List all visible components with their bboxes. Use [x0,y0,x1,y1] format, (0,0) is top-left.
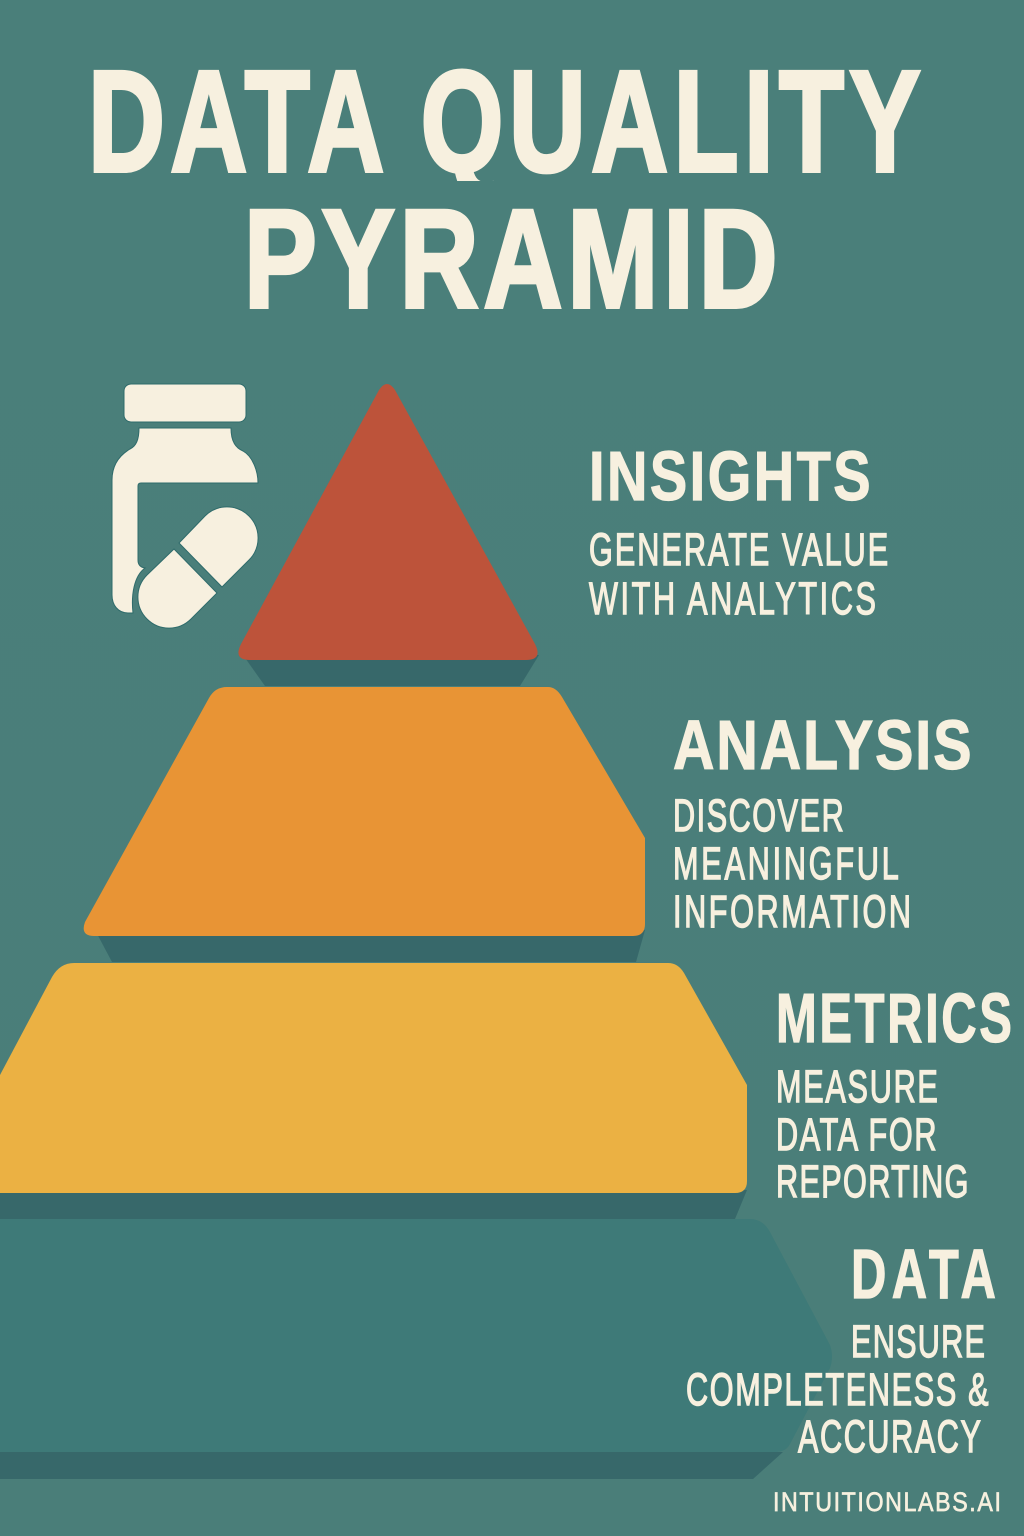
pyramid tier: analysis [84,687,645,962]
label: metrics: REPORTING [776,1157,968,1208]
title [94,68,922,309]
label: insights [589,438,888,625]
label: data: DATA [851,1234,996,1313]
label: analysis: DISCOVER [673,791,844,842]
title: DATA QUALITY [88,40,921,202]
label: data [686,1234,996,1463]
label: analysis: ANALYSIS [673,706,971,784]
label: metrics: METRICS [776,978,1012,1057]
pyramid tier: metrics [0,963,747,1219]
label: data: ACCURACY [798,1412,981,1463]
label: data: ENSURE [851,1317,985,1368]
label: analysis: INFORMATION [673,887,911,938]
label: insights: INSIGHTS [589,438,871,515]
icon: medicine bottle and capsule [112,384,258,628]
pyramid tier: data base [0,1219,832,1479]
title: PYRAMID [244,180,778,337]
label: analysis: MEANINGFUL [673,839,899,890]
label: analysis [673,706,971,938]
brand footer: INTUITIONLABS.AI [773,1487,1001,1517]
label: metrics: MEASURE [776,1062,938,1113]
pyramid tier: insights [238,384,539,686]
label: insights: GENERATE VALUE [589,525,888,576]
label: metrics [776,978,1012,1208]
label: insights: WITH ANALYTICS [589,574,876,625]
label: data: COMPLETENESS & [686,1365,989,1416]
label: metrics: DATA FOR [776,1110,936,1161]
